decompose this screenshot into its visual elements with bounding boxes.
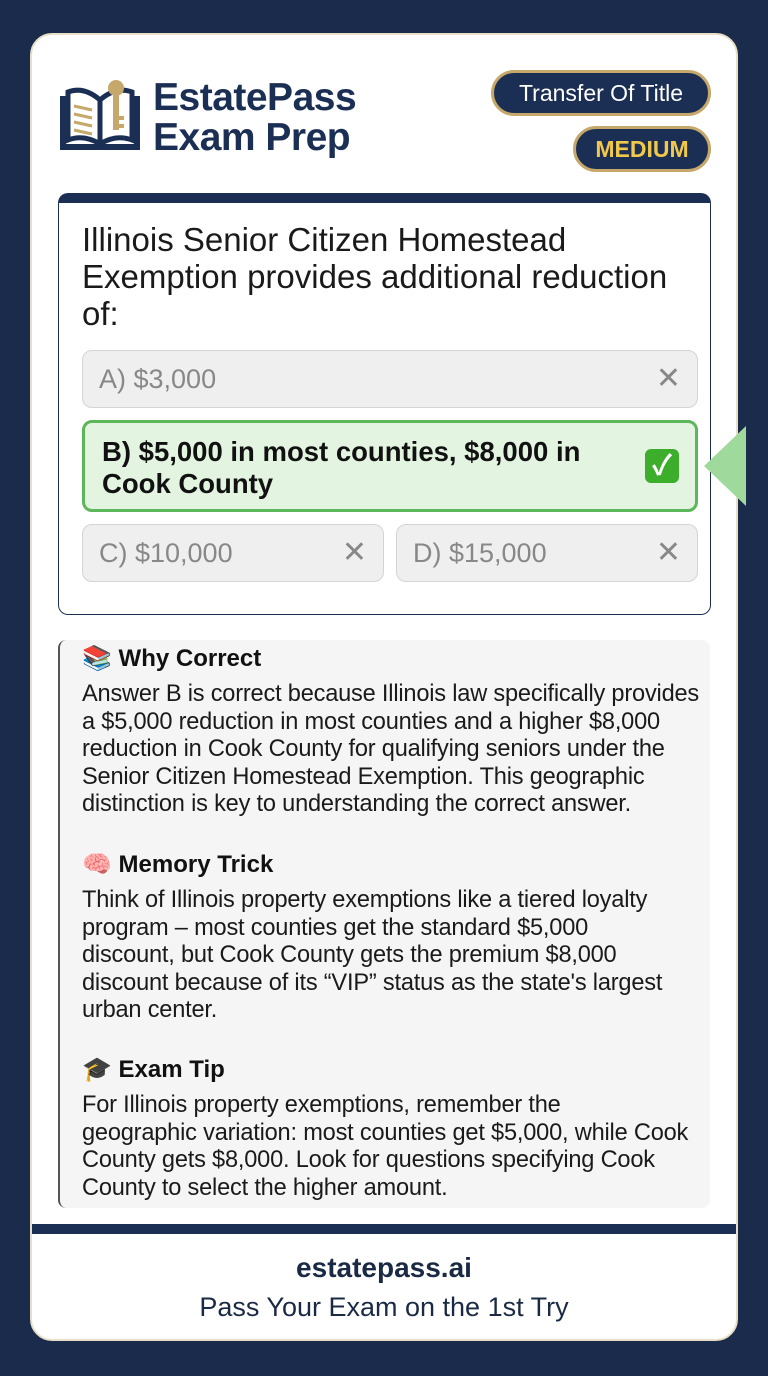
why correct: Senior Citizen Homestead Exemption. This geographic <box>82 764 644 790</box>
option A <box>82 350 698 408</box>
exam tip: 🎓 Exam Tip <box>82 1056 225 1083</box>
why correct: a $5,000 reduction in most counties and a higher $8,000 <box>82 708 660 734</box>
exam tip <box>82 1056 688 1200</box>
footer text: Pass Your Exam on the 1st Try <box>199 1292 569 1322</box>
exam tip: geographic variation: most counties get $5,000, while Cook <box>82 1120 688 1146</box>
arrow pointer <box>704 426 746 506</box>
memory trick: Think of Illinois property exemptions like a tiered loyalty <box>82 887 647 913</box>
option D <box>396 524 698 582</box>
brand title: EstatePass <box>153 76 356 119</box>
question text: of: <box>82 295 119 332</box>
memory trick: discount because of its “VIP” status as the state's largest <box>82 970 662 996</box>
memory trick: 🧠 Memory Trick <box>82 851 273 878</box>
exam tip: For Illinois property exemptions, remember the <box>82 1092 561 1118</box>
footer text: estatepass.ai <box>296 1252 472 1283</box>
question panel <box>58 193 711 615</box>
brand title <box>153 76 356 159</box>
question text: Exemption provides additional reduction <box>82 258 667 295</box>
explanation panel <box>58 640 710 1208</box>
question text <box>82 221 667 332</box>
question text: Illinois Senior Citizen Homestead <box>82 221 566 258</box>
why correct: Answer B is correct because Illinois law specifically provides <box>82 681 699 707</box>
why correct <box>82 645 699 817</box>
why correct: reduction in Cook County for qualifying seniors under the <box>82 736 665 762</box>
icon: check: ✓ <box>652 450 672 481</box>
footer bar <box>32 1224 736 1234</box>
option D: ✕ <box>656 536 681 569</box>
option C <box>82 524 384 582</box>
footer text <box>199 1252 569 1322</box>
option B correct: B) $5,000 in most counties, $8,000 in <box>102 436 580 467</box>
exam tip: County to select the higher amount. <box>82 1174 447 1200</box>
icon: check <box>645 449 679 483</box>
memory trick: urban center. <box>82 997 217 1023</box>
memory trick: program – most counties get the standard $5,000 <box>82 914 588 940</box>
logo icon <box>60 80 140 150</box>
difficulty pill: MEDIUM <box>595 136 689 162</box>
option B correct: Cook County <box>102 468 273 499</box>
difficulty pill <box>573 126 711 172</box>
memory trick: discount, but Cook County gets the premium $8,000 <box>82 942 616 968</box>
option D: D) $15,000 <box>413 538 547 568</box>
brand title: Exam Prep <box>153 116 350 159</box>
topic pill <box>491 70 711 116</box>
exam tip: County gets $8,000. Look for questions specifying Cook <box>82 1147 655 1173</box>
why correct: distinction is key to understanding the correct answer. <box>82 791 631 817</box>
why correct: 📚 Why Correct <box>82 645 261 672</box>
option B correct <box>82 420 698 512</box>
topic pill: Transfer Of Title <box>519 80 683 106</box>
option A: ✕ <box>656 362 681 395</box>
option C: ✕ <box>342 536 367 569</box>
option A: A) $3,000 <box>99 364 216 394</box>
option C: C) $10,000 <box>99 538 233 568</box>
memory trick <box>82 851 662 1023</box>
